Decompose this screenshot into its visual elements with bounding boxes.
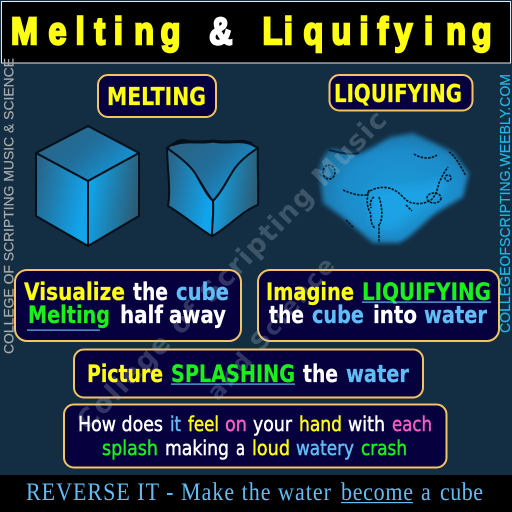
text: picture splashing the water: the bbox=[303, 360, 338, 388]
watermark: College of Scripting Music bbox=[71, 105, 393, 437]
text: visualize the cube melting half away bbox=[24, 278, 229, 331]
footer bar: cube bbox=[440, 479, 483, 506]
title bar bbox=[2, 2, 510, 63]
panel: how does it feel bbox=[64, 404, 446, 468]
badge: melting bbox=[98, 75, 216, 117]
text: imagine liquifying the cube into water: into bbox=[373, 301, 417, 329]
footer bar: REVERSE IT - Make the water bbox=[26, 479, 331, 506]
text: visualize the cube melting half away: the bbox=[133, 278, 168, 306]
text: how does it feel on your hand: watery bbox=[296, 436, 354, 460]
text: picture splashing the water: Picture bbox=[87, 360, 163, 388]
text: how does it feel on your hand: feel bbox=[188, 412, 219, 436]
text: how does it feel on your hand: hand bbox=[299, 412, 342, 436]
text: how does it feel on your hand: on bbox=[225, 412, 247, 436]
text: how does it feel on your hand: making bbox=[165, 436, 229, 460]
badge: liquifying: LIQUIFYING bbox=[334, 79, 462, 108]
icon: solid cube bbox=[36, 126, 139, 246]
text: picture splashing the water: water bbox=[346, 360, 409, 388]
panel: visualize bbox=[15, 270, 241, 341]
text: how does it feel on your hand: your bbox=[253, 412, 292, 436]
text: picture splashing the water: SPLASHING bbox=[171, 360, 295, 388]
footer bar: become bbox=[341, 479, 413, 506]
text: how does it feel on your hand: How does bbox=[78, 412, 163, 436]
text: how does it feel on your hand: a bbox=[236, 436, 245, 460]
text: how does it feel on your hand: it bbox=[170, 412, 181, 436]
text: how does it feel on your hand: loud bbox=[252, 436, 290, 460]
watermark: and Science bbox=[201, 252, 341, 406]
text: visualize the cube melting half away: cube bbox=[176, 278, 229, 306]
left vertical text: COLLEGE OF SCRIPTING MUSIC & SCIENCE bbox=[0, 58, 16, 354]
footer bar bbox=[0, 475, 512, 512]
panel: imagine bbox=[258, 270, 499, 341]
text: visualize the cube melting half away: Melting bbox=[28, 301, 110, 329]
text: imagine liquifying the cube into water: the bbox=[269, 301, 304, 329]
title bar: Melting bbox=[11, 11, 180, 53]
text: picture splashing the water bbox=[87, 360, 409, 388]
text: imagine liquifying the cube into water: Imagine bbox=[266, 278, 354, 306]
text: visualize the cube melting half away: away bbox=[169, 301, 226, 329]
text: how does it feel on your hand: splash bbox=[102, 436, 158, 460]
text: how does it feel on your hand: crash bbox=[361, 436, 407, 460]
title bar: Liquifying bbox=[263, 11, 491, 53]
icon: liquid water blob bbox=[319, 133, 469, 243]
text: how does it feel on your hand: with bbox=[348, 412, 385, 436]
badge: liquifying bbox=[330, 75, 472, 110]
text: visualize the cube melting half away: Visualize bbox=[24, 278, 125, 306]
panel: picture bbox=[74, 350, 423, 398]
title bar: & bbox=[209, 11, 232, 53]
text: imagine liquifying the cube into water: cube bbox=[312, 301, 364, 329]
text: imagine liquifying the cube into water: water bbox=[424, 301, 487, 329]
footer bar: a bbox=[421, 479, 431, 506]
text: imagine liquifying the cube into water bbox=[266, 278, 491, 329]
badge: melting: MELTING bbox=[107, 82, 206, 111]
text: visualize the cube melting half away: half bbox=[120, 301, 163, 329]
text: how does it feel on your hand: each bbox=[392, 412, 432, 436]
icon: half melted cube bbox=[167, 140, 258, 236]
text: how does it feel on your hand bbox=[78, 412, 432, 460]
